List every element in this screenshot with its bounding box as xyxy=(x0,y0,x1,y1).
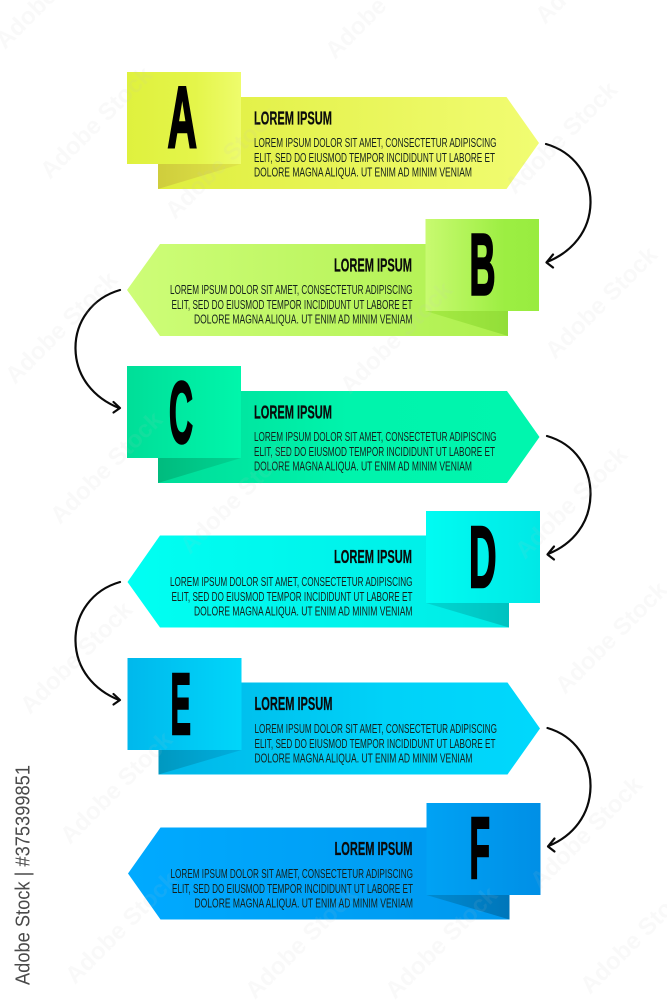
arrow banner E xyxy=(158,682,540,774)
body text D xyxy=(170,575,413,618)
panel: step F: F xyxy=(470,800,490,897)
panel: step A: A xyxy=(168,70,197,167)
body text E: LOREM IPSUM DOLOR SIT AMET, CONSECTETUR ADIPISCING xyxy=(254,722,497,736)
stock id side label: Adobe Stock | #375399851 xyxy=(12,765,34,985)
body text B: LOREM IPSUM DOLOR SIT AMET, CONSECTETUR ADIPISCING xyxy=(170,283,412,297)
body text F: DOLORE MAGNA ALIQUA. UT ENIM AD MINIM VENIAM xyxy=(194,896,413,910)
body text D: ELIT, SED DO EIUSMOD TEMPOR INCIDIDUNT UT LABORE ET xyxy=(172,590,413,604)
fold shadow C xyxy=(158,458,241,483)
body text A xyxy=(254,136,496,180)
watermark: Adobe Stock pattern: Adobe Stock xyxy=(0,266,123,389)
panel: step A xyxy=(127,70,539,189)
arrow: E to F xyxy=(548,728,591,852)
heading E: LOREM IPSUM xyxy=(254,694,332,714)
letter square C xyxy=(127,366,241,458)
arrow: A to B xyxy=(546,144,591,268)
watermark: Adobe Stock pattern: Adobe Stock xyxy=(55,726,178,849)
arrow: C to D xyxy=(547,436,591,560)
watermark: Adobe Stock pattern: Adobe Stock xyxy=(60,866,183,989)
letter square B xyxy=(426,219,539,311)
panel: step B xyxy=(127,217,539,336)
watermark: Adobe Stock pattern: Adobe Stock xyxy=(175,436,298,559)
arrow banner D xyxy=(128,536,509,628)
watermark: Adobe Stock pattern: Adobe Stock xyxy=(15,596,138,719)
letter square A xyxy=(127,72,241,164)
body text A: ELIT, SED DO EIUSMOD TEMPOR INCIDIDUNT UT LABORE ET xyxy=(254,151,495,165)
watermark: Adobe Stock pattern: Adobe Stock xyxy=(500,76,623,199)
body text D: DOLORE MAGNA ALIQUA. UT ENIM AD MINIM VENIAM xyxy=(194,604,412,618)
body text C: ELIT, SED DO EIUSMOD TEMPOR INCIDIDUNT UT LABORE ET xyxy=(254,445,495,459)
body text B: DOLORE MAGNA ALIQUA. UT ENIM AD MINIM VENIAM xyxy=(194,312,412,326)
arrow banner C xyxy=(158,391,540,483)
body text B xyxy=(170,283,413,326)
body text D: LOREM IPSUM DOLOR SIT AMET, CONSECTETUR ADIPISCING xyxy=(170,575,412,589)
watermark: Adobe Stock pattern: Adobe Stock xyxy=(335,276,458,399)
body text E: ELIT, SED DO EIUSMOD TEMPOR INCIDIDUNT UT LABORE ET xyxy=(254,737,496,751)
arrow: B to C xyxy=(75,290,120,412)
panel: step B: B xyxy=(470,217,496,314)
letter square F xyxy=(426,803,540,895)
body text E xyxy=(254,722,497,766)
heading A: LOREM IPSUM xyxy=(254,108,332,128)
heading D: LOREM IPSUM xyxy=(334,547,412,567)
arrow banner B xyxy=(127,244,508,336)
fold shadow D xyxy=(426,603,509,628)
body text C: DOLORE MAGNA ALIQUA. UT ENIM AD MINIM VENIAM xyxy=(254,460,472,474)
panel: step C: C xyxy=(169,364,193,462)
panel: step F xyxy=(128,800,540,920)
heading B: LOREM IPSUM xyxy=(334,256,412,276)
arrow banner F xyxy=(128,828,510,920)
body text F xyxy=(170,867,413,910)
letter square E xyxy=(128,658,242,750)
watermark: Adobe Stock pattern: Adobe Stock xyxy=(160,101,283,224)
body text B: ELIT, SED DO EIUSMOD TEMPOR INCIDIDUNT UT LABORE ET xyxy=(172,298,413,312)
fold shadow A xyxy=(158,164,241,189)
heading F: LOREM IPSUM xyxy=(334,839,412,859)
body text C: LOREM IPSUM DOLOR SIT AMET, CONSECTETUR ADIPISCING xyxy=(254,430,496,444)
watermark: Adobe Stock pattern: Adobe Stock xyxy=(45,406,168,529)
fold shadow B xyxy=(426,311,508,336)
fold shadow E xyxy=(158,750,242,774)
body text F: LOREM IPSUM DOLOR SIT AMET, CONSECTETUR ADIPISCING xyxy=(170,867,413,881)
body text F: ELIT, SED DO EIUSMOD TEMPOR INCIDIDUNT UT LABORE ET xyxy=(172,882,413,896)
body text A: DOLORE MAGNA ALIQUA. UT ENIM AD MINIM VENIAM xyxy=(254,166,472,180)
watermark: Adobe Stock pattern: Adobe Stock xyxy=(525,771,648,894)
watermark: Adobe Stock pattern: Adobe Stock xyxy=(540,241,663,364)
letter square D xyxy=(426,511,540,603)
watermark: Adobe Stock pattern: Adobe Stock xyxy=(35,61,158,184)
panel: step E: E xyxy=(170,656,191,753)
fold shadow F xyxy=(426,895,510,920)
arrow banner A xyxy=(158,97,539,189)
panel: step D: D xyxy=(469,509,496,606)
panel: step E xyxy=(128,656,540,774)
panel: step C xyxy=(127,364,540,483)
watermark: Adobe Stock pattern: Adobe Stock xyxy=(510,441,633,564)
body text A: LOREM IPSUM DOLOR SIT AMET, CONSECTETUR ADIPISCING xyxy=(254,136,496,150)
body text C xyxy=(254,430,496,474)
arrow: D to E xyxy=(75,582,120,704)
body text E: DOLORE MAGNA ALIQUA. UT ENIM AD MINIM VENIAM xyxy=(254,752,472,766)
panel: step D xyxy=(128,509,540,628)
heading C: LOREM IPSUM xyxy=(254,402,332,422)
